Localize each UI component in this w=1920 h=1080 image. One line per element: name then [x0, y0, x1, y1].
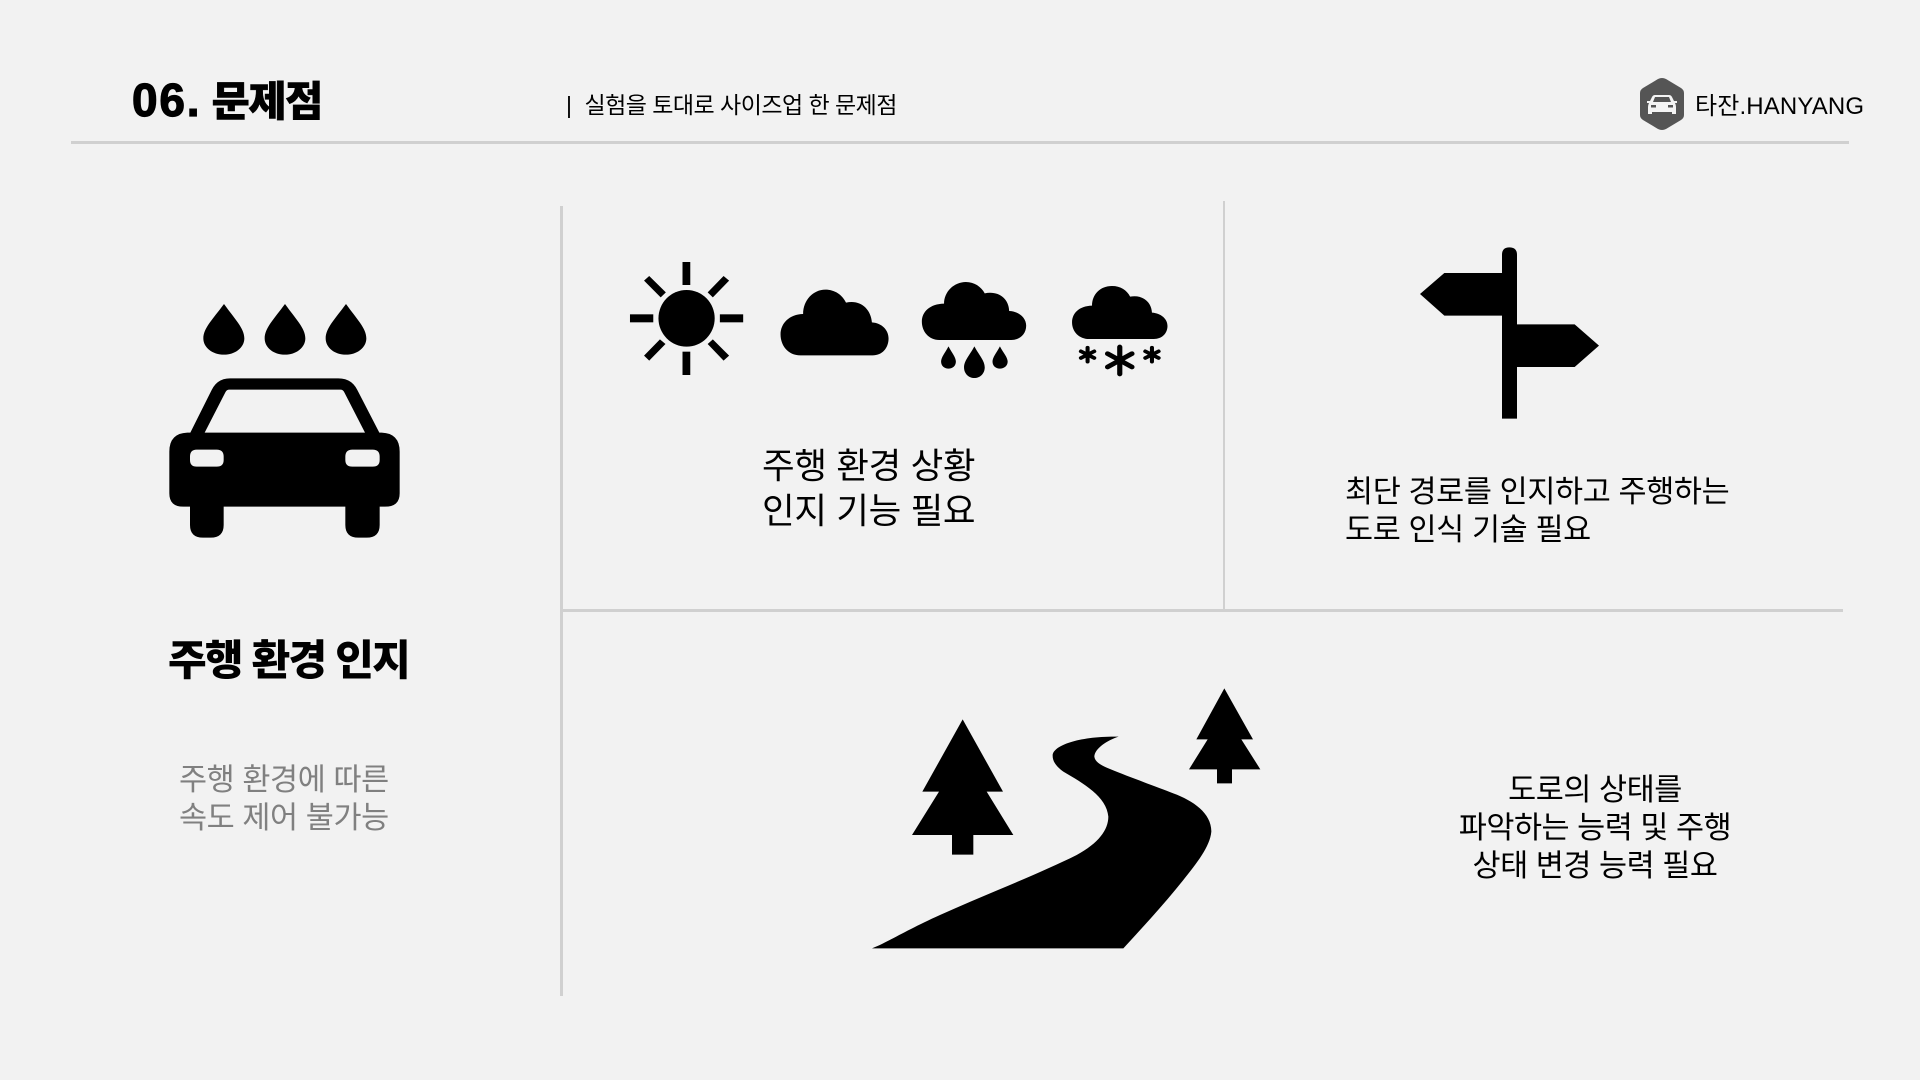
- heading: 주행 환경 인지: [168, 627, 409, 688]
- title: 06. 문제점: [132, 68, 322, 128]
- panel: route signpost: [1345, 247, 1729, 547]
- icon: weather row: [630, 262, 1168, 378]
- caption: road: 파악하는 능력 및 주행: [1459, 811, 1731, 845]
- panel: driving environment recognition: [168, 304, 409, 835]
- logo text: 타잔.HANYANG: [1695, 93, 1864, 120]
- caption: route: [1345, 475, 1729, 547]
- caption: route: 도로 인식 기술 필요: [1345, 513, 1591, 547]
- logo mark: [1640, 78, 1684, 130]
- icon: road and trees: [872, 688, 1260, 948]
- caption: route: 최단 경로를 인지하고 주행하는: [1345, 475, 1729, 509]
- description: [179, 763, 389, 835]
- caption: weather: [762, 446, 975, 531]
- panel: weather: [630, 262, 1168, 531]
- caption: weather: 주행 환경 상황: [762, 446, 975, 486]
- panel: road condition: [872, 688, 1731, 948]
- icon: car with rain drops: [169, 304, 400, 538]
- icon: signpost: [1420, 247, 1599, 419]
- subtitle: | 실험을 토대로 사이즈업 한 문제점: [566, 92, 897, 118]
- caption: road: 도로의 상태를: [1508, 773, 1682, 807]
- description: 주행 환경에 따른: [179, 763, 389, 797]
- caption: road: [1459, 773, 1731, 883]
- caption: road: 상태 변경 능력 필요: [1473, 849, 1717, 883]
- caption: weather: 인지 기능 필요: [762, 491, 975, 531]
- description: 속도 제어 불가능: [179, 801, 389, 835]
